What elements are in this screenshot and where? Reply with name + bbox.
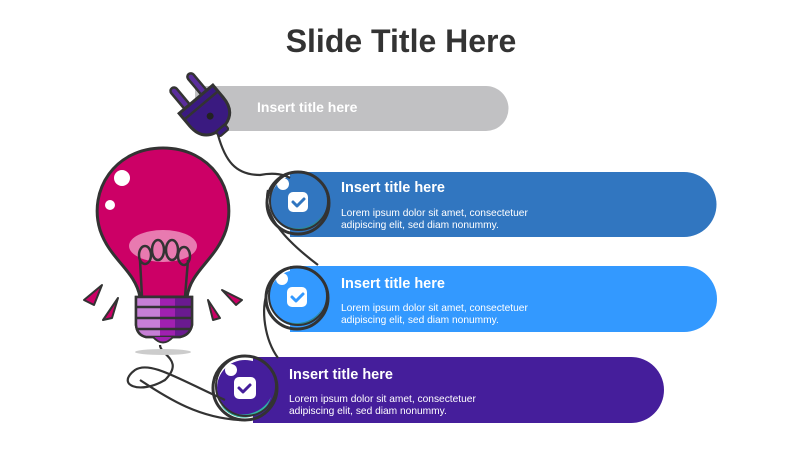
icon: spark rays [84,285,242,320]
panel: blue item 1 [267,172,716,237]
panel: blue item 2: Insert title here [341,276,445,292]
icon: check [234,377,256,399]
panel: blue item 2: adipiscing elit, sed diam nonummy. [341,315,499,326]
panel: gray bar: Insert title here [257,99,358,115]
cable [128,135,318,420]
panel: purple item 3: adipiscing elit, sed diam nonummy. [289,406,447,417]
title: Slide Title Here [286,23,516,59]
panel: blue item 1: adipiscing elit, sed diam nonummy. [341,220,499,231]
icon: light bulb [97,148,229,355]
panel: blue item 1: Insert title here [341,180,445,196]
panel: purple item 3: Insert title here [289,367,393,383]
panel: gray bar [195,86,508,131]
panel: purple item 3: Lorem ipsum dolor sit amet, consectetuer [289,394,476,405]
icon: check [288,192,308,212]
panel: blue item 1: Lorem ipsum dolor sit amet, consectetuer [341,208,528,219]
panel: blue item 2 [266,266,717,332]
panel: blue item 2: Lorem ipsum dolor sit amet, consectetuer [341,303,528,314]
panel: purple item 3 [213,356,664,423]
icon: check [287,287,307,307]
icon: plug [164,67,241,147]
